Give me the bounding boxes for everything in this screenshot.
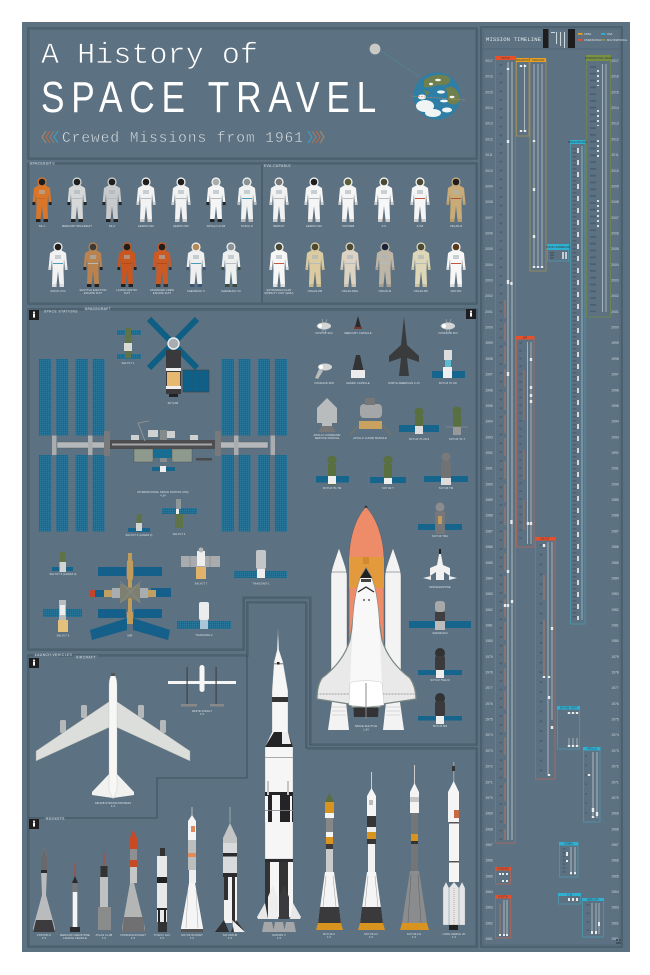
suit: SK-2: [102, 177, 122, 228]
Mercury capsule: MERCURY CAPSULE: [344, 331, 372, 335]
B-52: [36, 673, 190, 808]
icon: person scale: [29, 310, 39, 320]
timeline: Gemini: GEMINI: [564, 842, 573, 846]
heading: launch vehicles: LAUNCH VEHICLES: [35, 653, 72, 657]
panel: title: [28, 28, 477, 159]
timeline: Salyut: [535, 537, 556, 779]
Salyut 4: [162, 499, 197, 536]
Salyut 4: SALYUT 4: [173, 532, 186, 536]
timeline: Mir: [516, 336, 534, 547]
Gemini capsule: [346, 355, 370, 385]
Soyuz FG first: [181, 807, 203, 940]
timeline: Space Shuttle test flights: [546, 244, 571, 261]
suit: Orlan-MK: ORLAN-MK: [414, 289, 428, 293]
Soyuz FG rocket: [400, 765, 429, 939]
suit: Gemini G4C EVA: GEMINI G4C: [306, 224, 322, 228]
timeline: Skylab: [557, 706, 580, 749]
Saturn IB: [215, 807, 245, 940]
suit: SK-1: [32, 177, 52, 228]
Soyuz 7K-OK: [432, 350, 465, 385]
Soyuz TMA-M: [418, 648, 462, 682]
Voskhod rocket: [120, 830, 146, 940]
heading: aircraft: AIRCRAFT: [76, 656, 96, 660]
Soyuz TM: SOYUZ TM: [439, 486, 453, 490]
legend: key boxes: [543, 29, 575, 48]
icon: earth: [412, 72, 465, 120]
suit: Launch entry suit: SUIT: [124, 291, 130, 295]
Voskhod 2: [314, 364, 334, 385]
timeline: Apollo: [583, 747, 600, 822]
heading: rockets: ROCKETS: [46, 817, 65, 821]
suit: Orlan-MK: [411, 242, 431, 293]
Shenzhou: SHENZHOU: [432, 631, 448, 635]
legend: agencies: CNSA: [584, 32, 591, 36]
heading: spacesuits: SPACESUITS: [30, 162, 55, 166]
Soyuz FG first: 1:3: [190, 936, 194, 940]
timeline: Soyuz: SOYUZ: [501, 57, 510, 60]
suit: Sokol KV2: SOKOL KV2: [50, 289, 66, 293]
suit: Shenzhou V: [186, 242, 206, 293]
suit: Advanced crew escape suit: ADVANCED CREW: [150, 288, 175, 292]
legend: agencies: USA: [607, 32, 613, 36]
subtitle: Crewed Missions from 1961: [62, 131, 303, 147]
Soyuz MS: SOYUZ MS: [433, 724, 447, 728]
suit: Gemini G3C: GEMINI G3C: [138, 224, 154, 228]
Salyut 5: SALYUT 5 (ALMAZ 3): [49, 572, 77, 576]
Mercury capsule: [344, 316, 372, 335]
publisher mark: [616, 939, 621, 944]
suit: Orlan-M: ORLAN-M: [379, 289, 391, 293]
timeline: ISS: [585, 55, 613, 317]
moon orbit line: [381, 51, 420, 77]
suit: Feitian: [446, 242, 466, 293]
suit: Mercury: [62, 177, 92, 228]
timeline: Gemini: [559, 842, 578, 877]
Salyut 7: [181, 548, 220, 586]
Mir: [90, 553, 171, 640]
ISS: INTERNATIONAL SPACE STATION (ISS): [137, 490, 189, 494]
suit: A7L: A7L: [382, 224, 387, 228]
suit: Gemini G5C: GEMINI G5C: [173, 224, 189, 228]
B-52: NB-52B STRATOFORTRESS: [95, 801, 131, 805]
Soyuz TM: [424, 452, 468, 490]
Titan II GLV: [154, 848, 170, 940]
timeline: Vostok: [495, 895, 511, 938]
Saturn IB: 1:3: [228, 936, 232, 940]
timeline: Mir: MIR: [523, 336, 527, 340]
B-52: 1:3: [111, 804, 115, 808]
Salyut 6: [43, 600, 82, 638]
Saturn IB: SATURN IB: [223, 933, 237, 937]
timeline: Voskhod: VOSKHOD: [497, 868, 509, 870]
suit: Orlan-D: ORLAN-D: [450, 224, 462, 228]
Vostok: VOSTOK 3KA: [315, 331, 333, 335]
panel: mission timeline: [481, 27, 628, 947]
SpaceShipOne: SPACESHIPONE: [429, 585, 451, 589]
heading: spacecraft: SPACECRAFT: [85, 307, 111, 311]
Atlas LV-3B: ATLAS LV-3B: [96, 933, 113, 937]
suit: Orlan-D: [446, 177, 466, 228]
Apollo LM: [350, 398, 391, 440]
Saturn V: 1:3: [277, 936, 281, 940]
X-15: [388, 317, 420, 385]
timeline: Vostok: VOSTOK: [498, 896, 508, 898]
Soyuz FG rocket: SOYUZ-FG: [407, 932, 421, 936]
Soyuz 7K-TM: [316, 456, 349, 490]
SpaceShipOne: [423, 549, 457, 589]
suit: Orlan-DMA: ORLAN-DMA: [342, 289, 358, 293]
icon: person scale rockets: [29, 819, 39, 829]
Salyut 3: SALYUT 3 (ALMAZ 2): [125, 533, 153, 537]
Skylab: SKYLAB: [168, 401, 179, 405]
Titan II GLV: 1:3: [160, 936, 164, 940]
suit: Mercury: MERCURY SPACESUIT: [62, 224, 92, 228]
suit: Gemini G3C: [136, 177, 156, 228]
legend: agencies: [578, 32, 628, 42]
timeline: Mercury: [582, 898, 604, 937]
suit: Yastreb: [338, 177, 358, 228]
title line 1: A History of: [41, 39, 258, 73]
Space Shuttle: [317, 506, 416, 732]
suit: Launch entry suit: LAUNCH ENTRY: [116, 288, 138, 292]
suit: Sokol-K: SOKOL-K: [241, 224, 253, 228]
Soyuz 7K-OKS: [399, 408, 439, 441]
Tiangong-2: [177, 602, 231, 637]
icon: moon: [370, 44, 380, 54]
timeline: Tiangong: [530, 58, 546, 271]
timeline: X-15: X-15: [567, 894, 573, 896]
suit: SK-1: SK-1: [39, 224, 46, 228]
suit: EMU: EXTRAVEHICULAR: [267, 288, 291, 292]
Salyut 5: [49, 552, 77, 576]
Soyuz 7K-TM: SOYUZ 7K-TM: [323, 486, 341, 490]
White Knight: 1:3: [200, 712, 204, 716]
Voskhod: VOSKHOD 3KV: [438, 331, 458, 335]
panel: spacecraft and stations: [28, 307, 477, 745]
Voskhod: [438, 319, 458, 335]
ISS: [39, 359, 287, 532]
Saturn V: SATURN V: [272, 933, 286, 937]
Soyuz T: [370, 456, 406, 490]
Tiangong-1: TIANGONG-1: [252, 582, 270, 586]
legend: agencies: MULTINATIONAL: [607, 38, 628, 42]
Titan II GLV: TITAN II GLV: [154, 933, 170, 937]
Long March 2F: LONG MARCH 2F: [443, 932, 466, 936]
suit: Sokol KV2: [48, 242, 68, 293]
subtitle chevrons right: [308, 131, 324, 143]
suit: Berkut: [269, 177, 289, 228]
suit: Berkut: BERKUT: [273, 224, 285, 228]
Atlas LV-3B: [96, 853, 113, 940]
panel: launch vehicles: [28, 602, 477, 947]
Salyut 1: SALYUT 1: [122, 361, 135, 365]
suit: Apollo A7LB: APOLLO A7LB: [207, 224, 225, 228]
timeline: Space Shuttle: [568, 140, 588, 624]
Vostok-K rocket: [33, 848, 55, 940]
timeline: Mercury: MERCURY: [587, 898, 599, 902]
Tiangong-2: TIANGONG-2: [195, 633, 213, 637]
Saturn V: [257, 628, 301, 940]
Space Shuttle: 1:24: [363, 728, 369, 732]
suit: Orlan-DMA: [340, 242, 360, 293]
Voskhod 2: VOSKHOD 3KD: [314, 381, 334, 385]
Soyuz rocket 2: 1:3: [369, 935, 373, 939]
Salyut 3: [125, 514, 153, 537]
suit: Shenzhou VII: [221, 242, 241, 293]
timeline: Tiangong: TIANGONG: [532, 59, 545, 62]
timeline: Space Shuttle: SPACE SHUTTLE: [568, 141, 588, 144]
suit: A7LB: [410, 177, 430, 228]
suit: Orlan-M: [375, 242, 395, 293]
Soyuz 7K-T: SOYUZ 7K-T: [449, 437, 465, 441]
timeline: Salyut: SALYUT: [540, 538, 550, 540]
Soyuz rocket 2: SOYUZ-U2: [364, 932, 378, 936]
suit: Gemini G5C: [171, 177, 191, 228]
Vostok-K rocket: 1:3: [42, 936, 46, 940]
Long March 2F: [443, 762, 466, 939]
suit: Apollo A7LB: [206, 177, 226, 228]
Mir: MIR: [127, 634, 133, 638]
Soyuz rocket 2: [358, 772, 385, 939]
timeline: Shenzhou: SHENZHOU: [516, 59, 529, 62]
suit: EMU: [265, 242, 293, 295]
White Knight: WHITE KNIGHT: [192, 709, 212, 713]
Vostok: [315, 319, 333, 335]
Soyuz 7K-OKS: SOYUZ 7K-OKS: [409, 437, 429, 441]
Soyuz TMA-M: SOYUZ TMA-M: [430, 678, 450, 682]
icon: person scale right: [466, 309, 476, 319]
Mercury-Redstone: LAUNCH VEHICLE: [63, 936, 87, 940]
Voskhod rocket: VOSKHOD ROCKET: [120, 933, 146, 937]
timeline: Soyuz: [495, 56, 516, 843]
Vostok-K rocket: VOSTOK-K: [37, 933, 51, 937]
Atlas LV-3B: 1:3: [102, 936, 106, 940]
Gemini capsule: GEMINI CAPSULE: [346, 381, 370, 385]
suit: A7L: [374, 177, 394, 228]
Salyut 6: SALYUT 6: [57, 634, 70, 638]
suit: Orlan-DM: ORLAN-DM: [308, 289, 322, 293]
timeline: X-15: [558, 893, 581, 904]
White Knight: [168, 665, 236, 716]
ISS: 4.24: [160, 494, 166, 498]
Apollo CSM: [313, 398, 341, 440]
suit: Gemini G4C EVA: [304, 177, 324, 228]
Shenzhou: [409, 601, 471, 635]
subtitle chevrons left: [42, 131, 58, 143]
suit: Launch entry suit: [116, 242, 138, 295]
Soyuz TMA: SOYUZ TMA: [432, 534, 448, 538]
suit: Yastreb: YASTREB: [342, 224, 354, 228]
Soyuz 7K-T: [446, 406, 468, 441]
year axis left: [485, 59, 493, 941]
Soyuz rocket 1: SOYUZ-U: [323, 932, 335, 936]
Salyut 1: [117, 328, 141, 365]
Soyuz 7K-OK: SOYUZ 7K-OK: [439, 381, 457, 385]
suit: Shuttle ejection escape suit: [80, 242, 107, 295]
suit: Shuttle ejection escape suit: SHUTTLE EJECTION: [80, 288, 107, 292]
timeline: Shenzhou: [516, 58, 529, 136]
suit: Orlan-DM: [305, 242, 325, 293]
suit: SK-2: SK-2: [109, 224, 116, 228]
timeline: Space Shuttle test flights: SPACE COMMERCIAL: [546, 246, 571, 249]
Mercury-Redstone: MERCURY-REDSTONE: [60, 933, 90, 937]
suit: Advanced crew escape suit: ESCAPE SUIT: [153, 291, 171, 295]
Soyuz FG rocket: 1:3: [412, 935, 416, 939]
suit: Sokol-K: [237, 177, 257, 228]
Space Shuttle: SPACE SHUTTLE: [355, 724, 377, 728]
Apollo LM: APOLLO LUNAR MODULE: [353, 436, 387, 440]
timeline: Voskhod: [495, 867, 511, 884]
suit: Shuttle ejection escape suit: ESCAPE SUIT: [84, 291, 102, 295]
Salyut 7: SALYUT 7: [195, 582, 208, 586]
suit: Feitian: FEITIAN: [451, 289, 461, 293]
Soyuz FG first: SOYUZ ROCKET: [181, 933, 203, 937]
suit: Shenzhou V: SHENZHOU V: [187, 289, 205, 293]
Soyuz T: SOYUZ T: [382, 486, 394, 490]
suit: EMU: MOBILITY UNIT (EMU): [265, 291, 293, 295]
Soyuz rocket 1: 1:3: [327, 935, 331, 939]
panel: spacesuits: [28, 161, 477, 304]
Tiangong-1: [234, 550, 287, 586]
suit: Advanced crew escape suit: [150, 242, 175, 295]
heading: space stations: SPACE STATIONS: [44, 310, 78, 314]
Apollo CSM: SERVICE MODULE: [315, 436, 339, 440]
icon: person scale aircraft: [29, 658, 39, 668]
Soyuz TMA: [418, 502, 462, 538]
suit: A7LB: A7LB: [417, 224, 424, 228]
X-15: NORTH AMERICAN X-15: [388, 381, 420, 385]
Voskhod rocket: 1:3: [131, 936, 135, 940]
year axis right: [611, 59, 619, 941]
timeline: Skylab: SKYLAB / ASTP: [560, 706, 578, 710]
Skylab: [149, 319, 209, 405]
Apollo CSM: APOLLO COMMAND/: [313, 433, 341, 437]
title line 2: SPACE TRAVEL: [41, 73, 376, 122]
Soyuz MS: [418, 693, 462, 728]
Mercury-Redstone: [60, 863, 90, 940]
timeline: ISS: INTERNATIONAL SPACE: [585, 57, 613, 60]
heading: mission timeline: MISSION TIMELINE: [486, 36, 542, 43]
Long March 2F: 1:3: [452, 935, 456, 939]
suit: Shenzhou VII: SHENZHOU VII: [221, 289, 241, 293]
Soyuz rocket 1: [316, 793, 343, 939]
heading: EVA-capable: EVA-CAPABLE: [264, 164, 291, 168]
legend: agencies: USSR/RUSSIA: [584, 38, 602, 42]
timeline: Apollo: APOLLO: [587, 748, 597, 750]
